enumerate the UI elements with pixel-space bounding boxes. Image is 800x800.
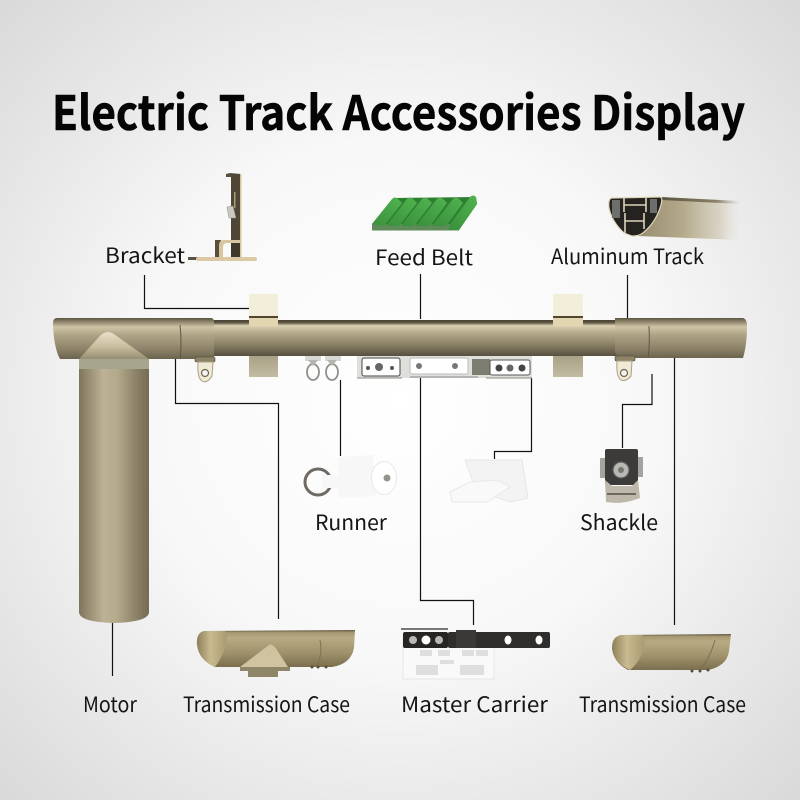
- label: Aluminum Track: Aluminum Track: [551, 241, 704, 271]
- icon: bracket: [188, 173, 257, 261]
- motor body: [79, 369, 149, 623]
- track assembly: [53, 294, 747, 623]
- icon: transmission case right: [612, 634, 731, 672]
- leader lines: [112, 274, 674, 676]
- motor collar: [79, 359, 149, 369]
- icon: carrier clip: [450, 460, 528, 502]
- master carrier rail parts: [357, 356, 532, 378]
- label: Transmission Case right: Transmission Case: [579, 689, 746, 719]
- bracket clip: rear left lower: [249, 356, 278, 377]
- right transmission housing: [615, 318, 747, 358]
- icon: aluminum track: [609, 197, 740, 240]
- title: Electric Track Accessories Display: [52, 75, 745, 144]
- icon: shackle: [600, 449, 643, 503]
- label: Runner: Runner: [315, 507, 388, 537]
- shackle eye right: [615, 356, 635, 380]
- main rail: [212, 320, 617, 356]
- icon: runner: [305, 455, 396, 498]
- left transmission housing: [53, 318, 214, 359]
- label: Shackle: Shackle: [580, 507, 658, 537]
- label: Motor: Motor: [83, 689, 138, 719]
- label: Bracket: Bracket: [105, 240, 185, 270]
- mini runners: [305, 355, 341, 380]
- motor cone: [79, 332, 149, 359]
- icon: transmission case with motor mount: [197, 630, 355, 677]
- bracket clip: rear right lower: [553, 356, 583, 377]
- bracket clip: front left: [249, 294, 278, 326]
- bracket clip: front right: [553, 294, 583, 326]
- label: Master Carrier: Master Carrier: [401, 689, 549, 719]
- icon: master carrier: [401, 628, 550, 679]
- label: Feed Belt: Feed Belt: [375, 242, 473, 272]
- icon: feed belt: [372, 196, 477, 230]
- shackle eye left: [195, 357, 215, 382]
- label: Transmission Case left: Transmission Case: [183, 689, 350, 719]
